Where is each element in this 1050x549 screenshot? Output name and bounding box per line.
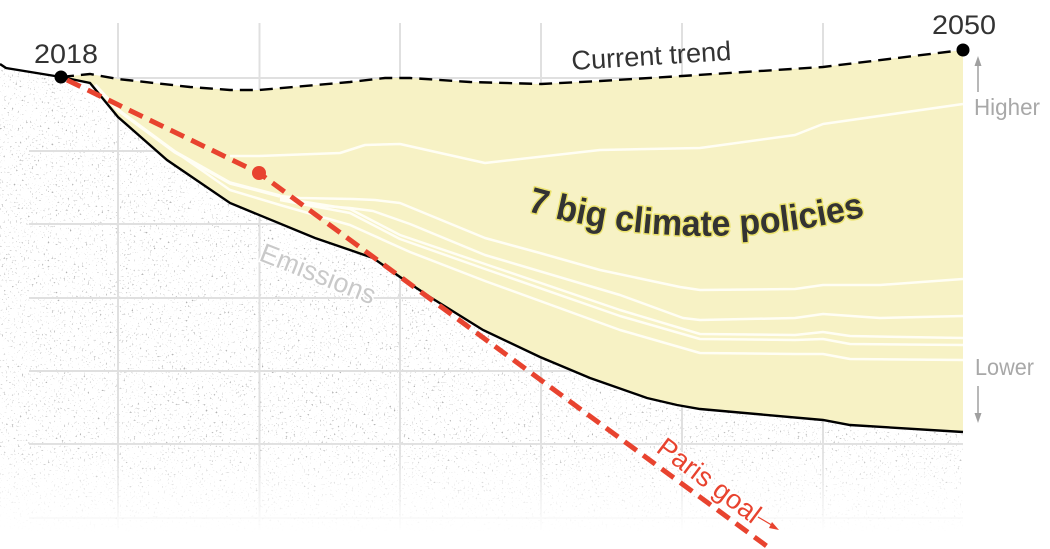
current trend dashed line (61, 50, 963, 90)
headline: 7 big climate policies: 7 big climate policies (530, 186, 864, 244)
marker: red point on Paris goal line (252, 166, 266, 180)
label: 2050: 2050 (932, 10, 996, 40)
arrow: Paris goal direction (758, 517, 779, 530)
label: Higher: Higher (974, 94, 1040, 120)
Paris goal dashed red line (67, 80, 768, 547)
label: Emissions: Emissions (256, 238, 380, 310)
marker: 2018 point (54, 70, 68, 84)
white policy lines (95, 85, 963, 360)
arrow: up (974, 56, 982, 92)
marker: 2050 point (956, 44, 970, 56)
yellow band: range of policy outcomes (61, 50, 963, 432)
label: Current trend: Current trend (570, 36, 732, 76)
emissions line (black) (0, 64, 963, 432)
label: Lower: Lower (975, 354, 1034, 380)
label: Paris goal: Paris goal (651, 432, 767, 529)
label: 2018: 2018 (34, 39, 98, 69)
arrow: down (974, 386, 982, 423)
